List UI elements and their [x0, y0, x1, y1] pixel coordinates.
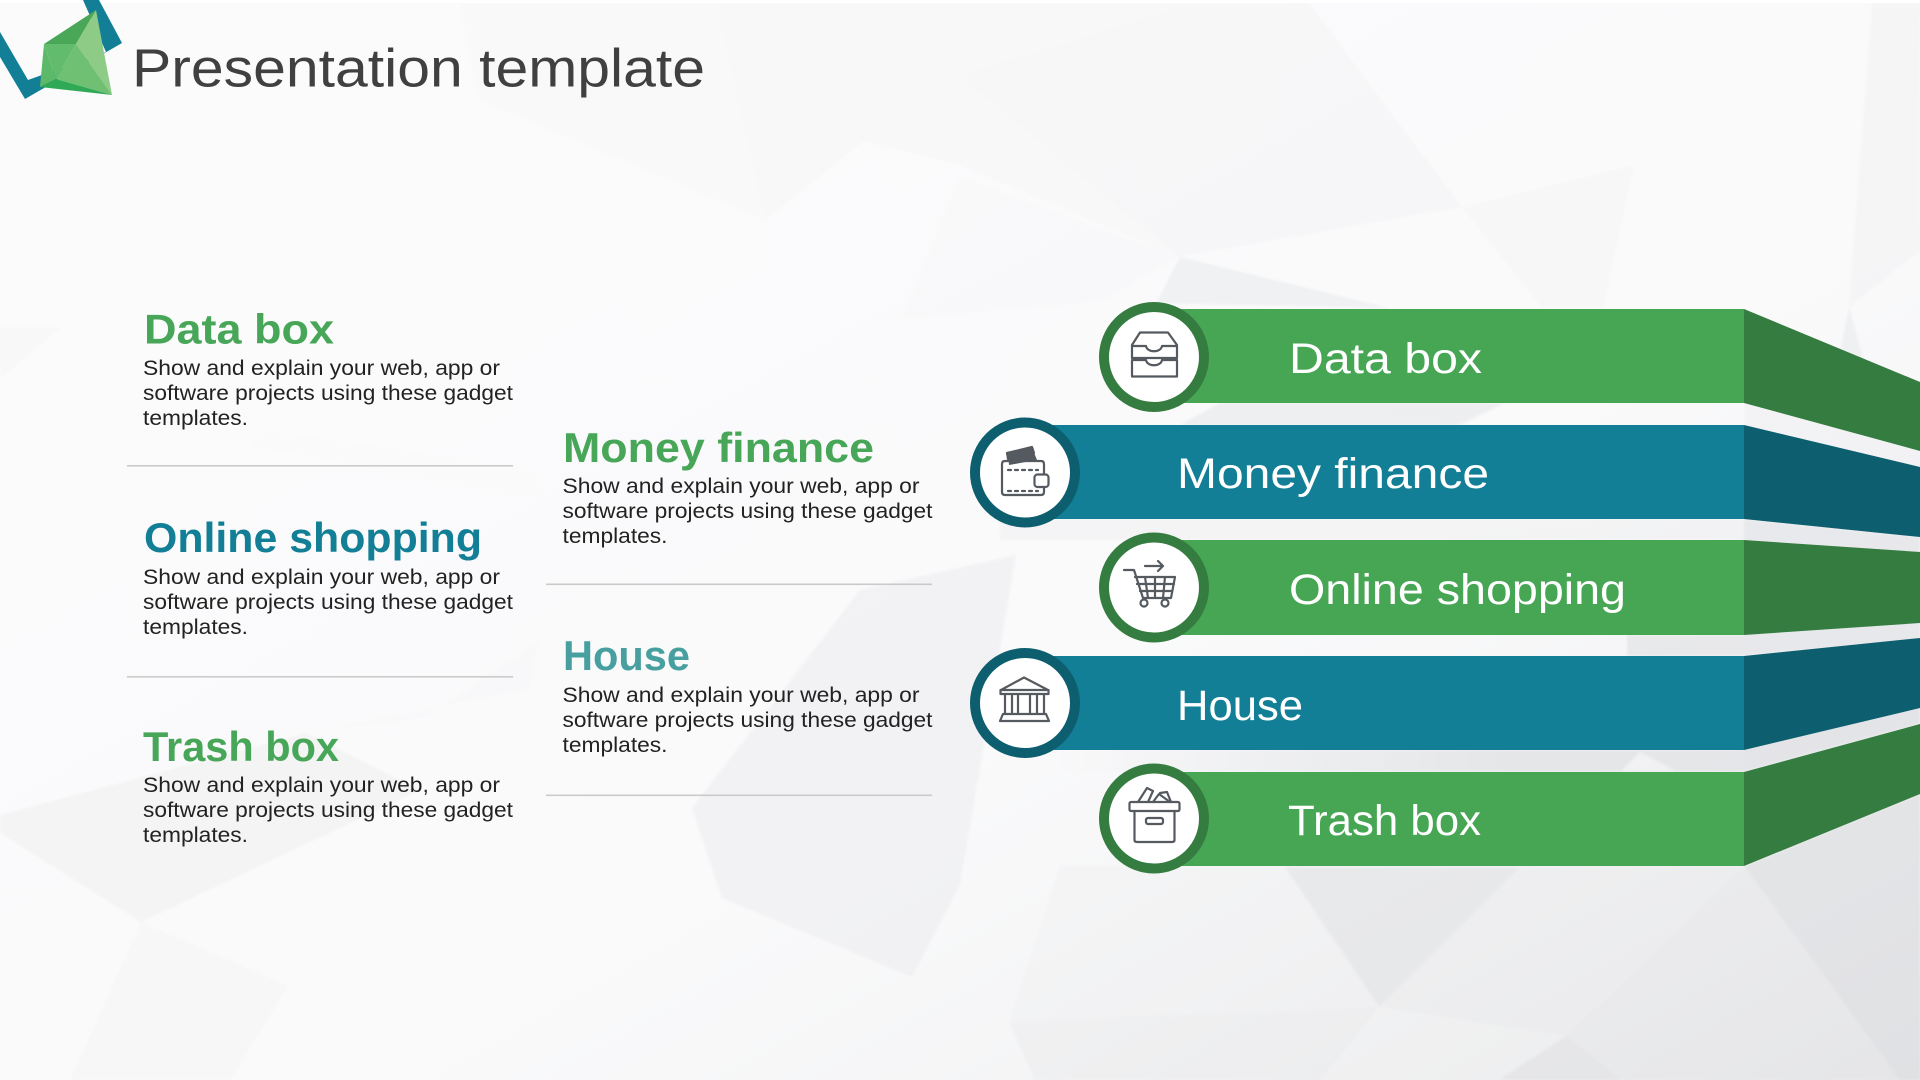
- ribbon: House: [975, 638, 1920, 753]
- text block: Money finance: software projects using these gadget: [562, 499, 933, 523]
- text block: Data box: Show and explain your web, app or: [143, 356, 500, 380]
- ribbon: Trash box: Trash box: [1288, 797, 1481, 845]
- ribbon: Data box: Data box: [1289, 335, 1483, 383]
- ribbon: Money finance: [975, 422, 1920, 537]
- text block: Money finance: Show and explain your web, app or: [562, 474, 920, 498]
- text block: Data box: Data box: [144, 306, 335, 352]
- ribbon icon: storage box: [1104, 768, 1204, 868]
- text block: Money finance: Money finance: [563, 424, 874, 471]
- text block: Data box: templates.: [143, 406, 248, 430]
- text block: Money finance: [562, 424, 933, 548]
- text block: Data box: [143, 306, 513, 430]
- text block: House: Show and explain your web, app or: [562, 683, 920, 707]
- ribbon: Online shopping: Online shopping: [1289, 566, 1626, 614]
- text block: Trash box: software projects using these gadget: [143, 798, 513, 822]
- text block: Trash box: templates.: [143, 823, 248, 847]
- logo: teal zigzag and green gem: [0, 0, 122, 99]
- ribbon icon: shopping cart: [1104, 538, 1204, 638]
- text block: Money finance: templates.: [562, 524, 668, 548]
- text block: Trash box: [143, 723, 513, 847]
- ribbon icon: inbox trays: [1104, 307, 1204, 407]
- text block: House: House: [563, 632, 690, 679]
- ribbon: Money finance: Money finance: [1177, 450, 1489, 498]
- ribbon: House: House: [1177, 682, 1303, 730]
- title: Presentation template: [132, 38, 705, 98]
- text block: Data box: software projects using these gadget: [143, 381, 513, 405]
- ribbon icon: bank building: [975, 653, 1075, 753]
- text block: Online shopping: software projects using these gadget: [143, 590, 513, 614]
- text block: House: software projects using these gadget: [562, 708, 933, 732]
- text block: House: [562, 632, 933, 757]
- text block: Online shopping: [143, 514, 513, 639]
- text block: Trash box: Show and explain your web, app or: [143, 773, 500, 797]
- text block: House: templates.: [562, 733, 668, 757]
- text block: Trash box: Trash box: [143, 723, 340, 770]
- ribbon: Data box: [1104, 307, 1920, 451]
- text block: Online shopping: templates.: [143, 615, 248, 639]
- text block: Online shopping: Online shopping: [144, 514, 482, 561]
- ribbon: Trash box: [1104, 724, 1920, 868]
- text block: Online shopping: Show and explain your web, app or: [143, 565, 500, 589]
- ribbon: Online shopping: [1104, 538, 1920, 638]
- ribbon icon: wallet: [975, 422, 1075, 522]
